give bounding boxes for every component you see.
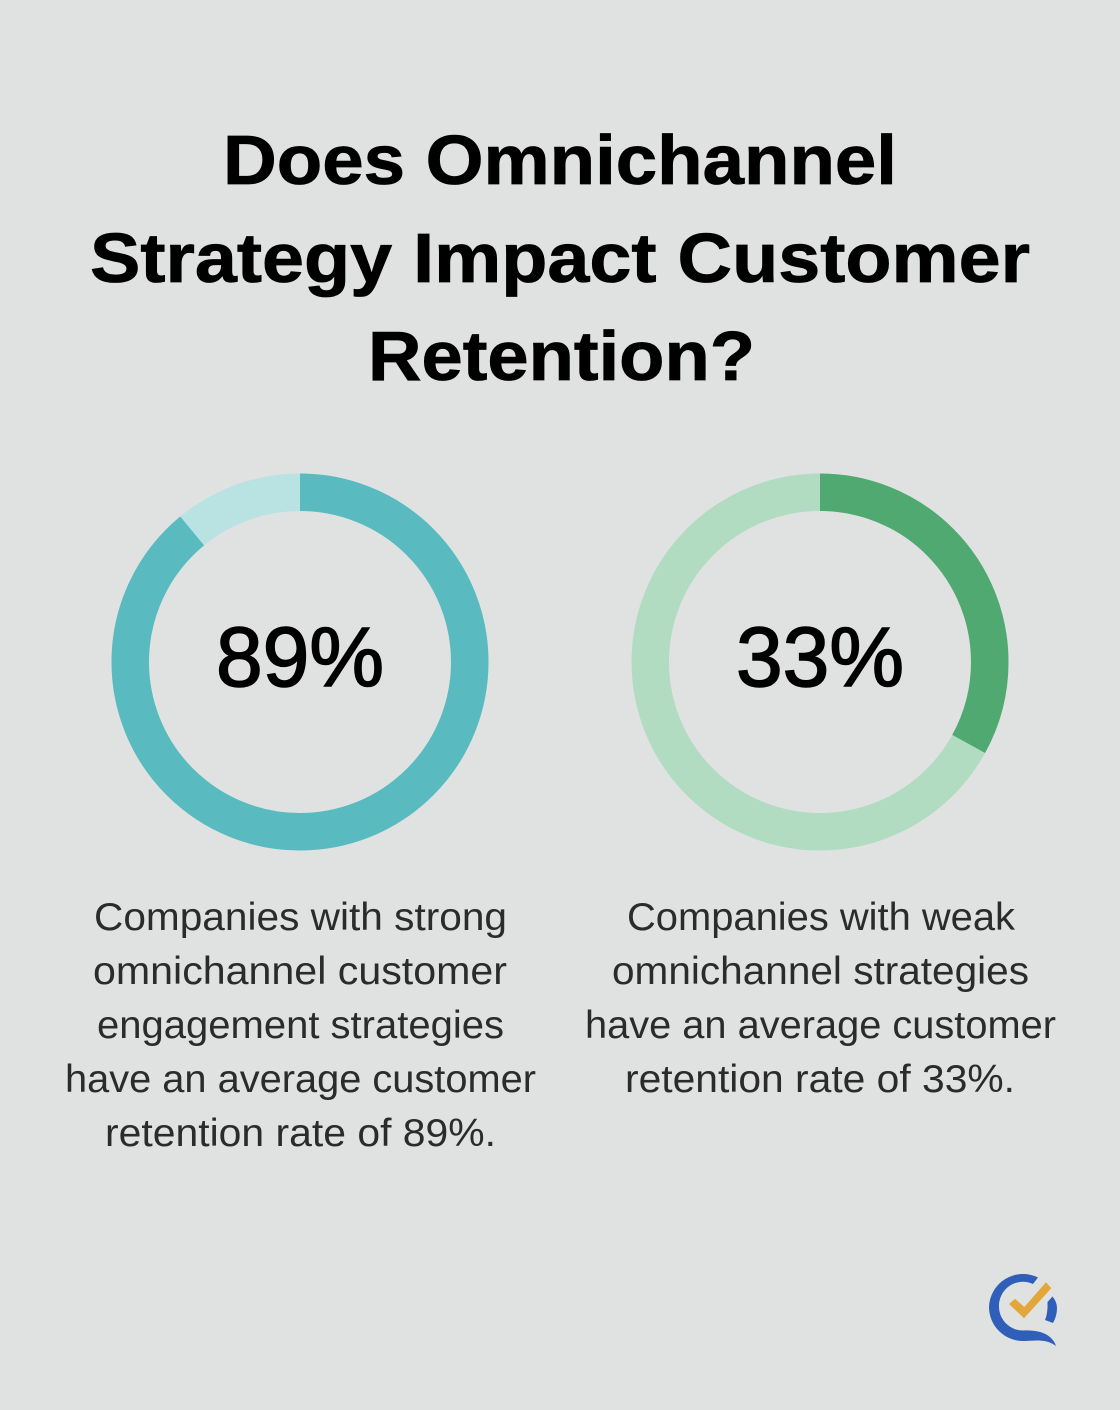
value: 33%: 33% [736,610,904,704]
panel: strong omnichannel [65,492,536,1155]
description: weak strategies: retention rate of 33%. [625,1058,1015,1101]
description: strong strategies: have an average customer [65,1058,536,1101]
description: strong strategies: omnichannel customer [93,950,507,993]
description: strong strategies: Companies with strong [94,896,507,939]
description: weak strategies: have an average customer [585,1004,1056,1047]
description: strong strategies: engagement strategies [97,1004,504,1047]
description: strong strategies [65,896,536,1155]
value: 89%: 89% [216,610,384,704]
title [90,121,1030,395]
donut chart: 89% [130,492,470,832]
description: weak strategies [585,896,1056,1101]
description: weak strategies: Companies with weak [627,896,1016,939]
panel: weak omnichannel [585,492,1056,1101]
description: weak strategies: omnichannel strategies [612,950,1029,993]
title: Strategy Impact Customer [90,219,1030,297]
title: Does Omnichannel [223,121,897,199]
donut chart: 33% [650,492,990,832]
icon: logo speech bubble with check mark [989,1274,1057,1346]
description: strong strategies: retention rate of 89%. [105,1112,496,1155]
title: Retention? [368,317,755,395]
